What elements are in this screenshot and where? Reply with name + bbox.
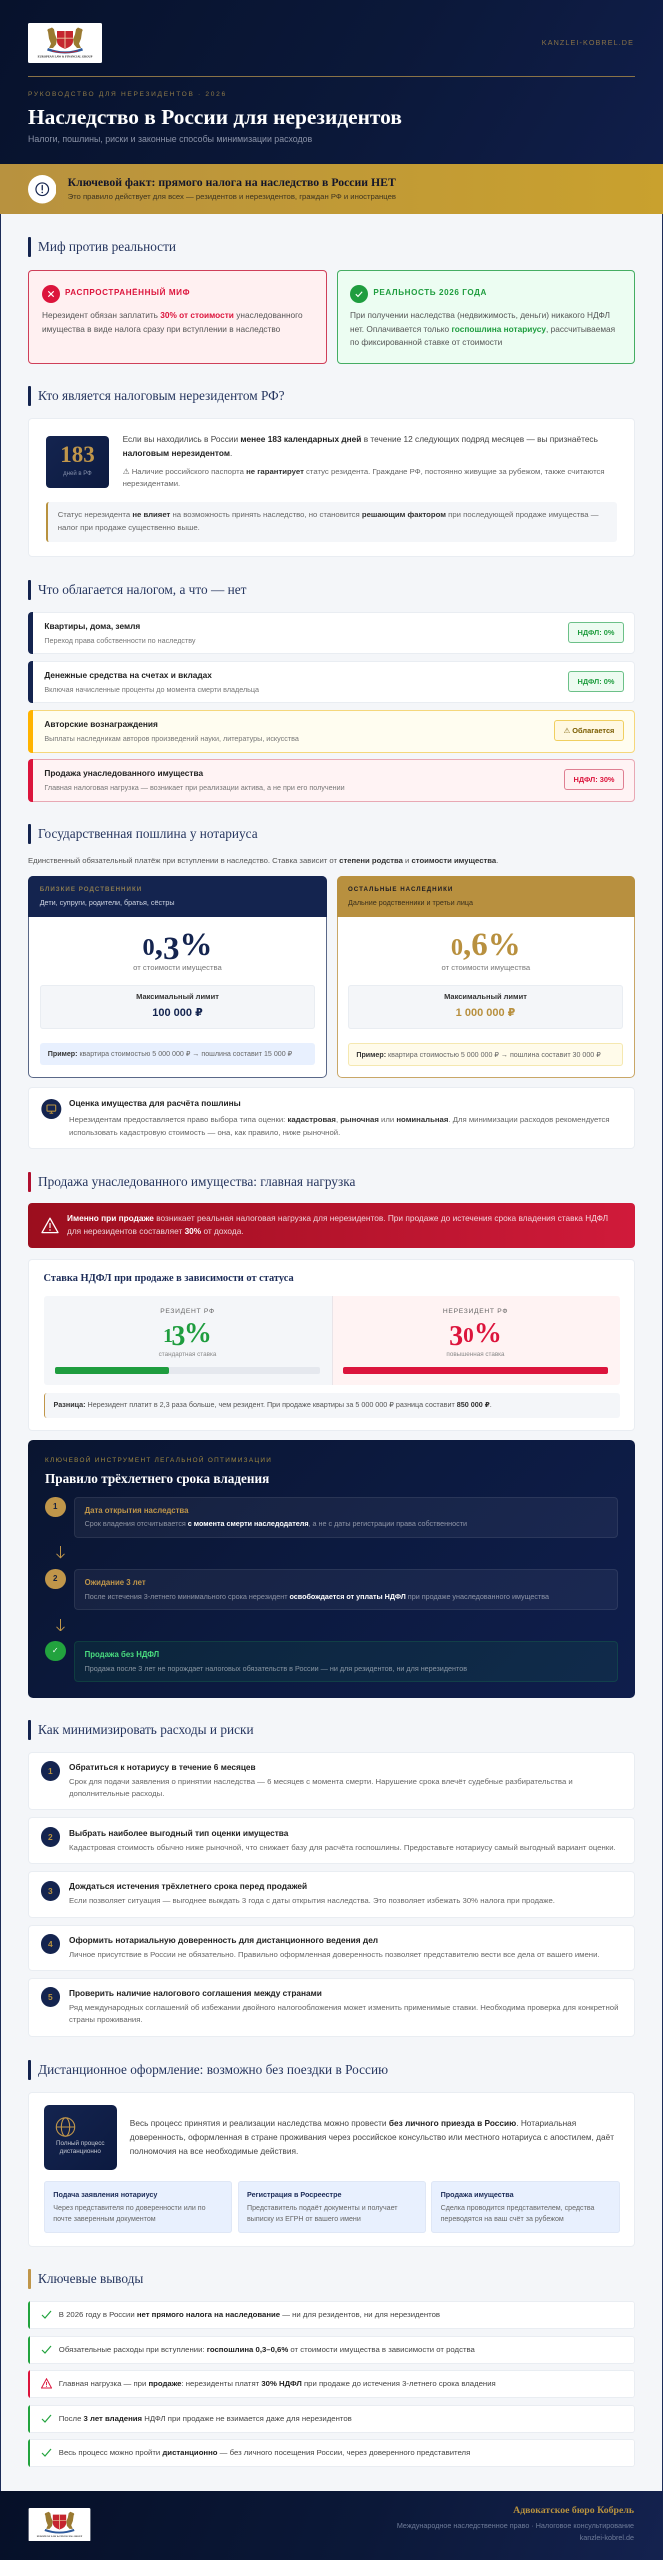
tip card 3	[28, 1871, 635, 1918]
step 2	[45, 1569, 618, 1610]
tip card 2	[28, 1817, 635, 1864]
row: sale of inherited property	[28, 759, 635, 802]
tip card 3: Если позволяет ситуация — выгоднее выждать 3 года с даты открытия наследства. Это позволяет избежать 30% налога при продаже.	[69, 1896, 555, 1905]
row: real estate: Квартиры, дома, земля	[44, 621, 140, 631]
step 2: После истечения 3-летнего минимального срока нерезидент освобождается от уплаты НДФЛ при продаже унаследованного имущества	[85, 1592, 549, 1601]
resident column: 13%	[163, 1318, 212, 1352]
myth text: имущества в виде налога сразу при вступлении в наследство	[42, 324, 280, 334]
header band: БЛИЗКИЕ РОДСТВЕННИКИ	[40, 886, 142, 893]
step 1	[45, 1497, 618, 1538]
non-resident column: повышенная ставка	[446, 1351, 505, 1358]
tip card 3: 3	[48, 1886, 53, 1896]
difference note	[44, 1393, 620, 1418]
logo: EUROPEAN LAW & FINANCIAL GROUP	[37, 55, 92, 59]
heading: myth vs reality: Миф против реальности	[38, 239, 176, 254]
callout: налог при продаже существенно выше.	[58, 523, 200, 532]
valuation text	[69, 1115, 610, 1137]
reality text: При получении наследства (недвижимость, деньги) никакого НДФЛ	[350, 310, 610, 320]
row: sale of inherited property: Продажа унаследованного имущества	[44, 768, 203, 778]
tip card 4	[28, 1925, 635, 1971]
rule title: Правило трёхлетнего срока владения	[45, 1471, 269, 1486]
title: Наследство в России для нерезидентов	[28, 105, 402, 129]
arrow	[56, 1546, 65, 1558]
panel: other heirs: от стоимости имущества	[441, 963, 530, 972]
globe badge	[44, 2105, 117, 2170]
valuation title: Оценка имущества для расчёта пошлины	[69, 1098, 241, 1108]
state fee intro: Единственный обязательный платёж при вступлении в наследство. Ставка зависит от степени родства и стоимости имущества.	[28, 856, 498, 865]
heading: state fee: Государственная пошлина у нотариуса	[38, 826, 258, 841]
remote text: полномочия на все необходимые действия.	[130, 2146, 298, 2156]
step 1: Срок владения отсчитывается с момента смерти наследодателя, а не с даты регистрации права собственности	[85, 1519, 467, 1528]
step 1: 1	[53, 1502, 57, 1511]
step: notary: почте заверенным документом	[53, 2215, 156, 2223]
row: real estate: НДФЛ: 0%	[578, 628, 614, 637]
header	[0, 0, 663, 164]
header band: Дети, супруги, родители, братья, сёстры	[40, 898, 175, 907]
reality text: нет. Оплачивается только госпошлина нотариусу, рассчитываемая	[350, 324, 615, 334]
eyebrow: КЛЮЧЕВОЙ ИНСТРУМЕНТ ЛЕГАЛЬНОЙ ОПТИМИЗАЦИИ	[45, 1457, 272, 1464]
non-resident column: НЕРЕЗИДЕНТ РФ	[443, 1308, 508, 1315]
passport warning: ⚠ Наличие российского паспорта не гарантирует статус резидента. Граждане РФ, постоянно живущие за рубежом, также считаются	[123, 467, 605, 476]
icon: cross	[42, 285, 60, 303]
panel: property valuation	[28, 1087, 635, 1149]
myth text: Нерезидент обязан заплатить 30% от стоимости унаследованного	[42, 310, 303, 320]
heading: who is non-resident: Кто является налоговым нерезидентом РФ?	[38, 388, 285, 403]
limit box: Максимальный лимит	[136, 992, 219, 1001]
row: bank deposits	[28, 661, 635, 703]
definition text: налоговым нерезидентом.	[123, 448, 232, 458]
takeaway 4: После 3 лет владения НДФЛ при продаже не взимается даже для нерезидентов	[59, 2414, 352, 2423]
step: sale: Продажа имущества	[441, 2190, 514, 2199]
step: sale	[431, 2181, 620, 2233]
step 3: Продажа без НДФЛ	[85, 1650, 159, 1659]
footer	[0, 2491, 663, 2560]
row: royalties	[28, 710, 635, 753]
step 3: Продажа после 3 лет не порождает налоговых обязательств в России — ни для резидентов, ни для нерезидентов	[85, 1664, 467, 1673]
limit box	[40, 985, 315, 1029]
step 1: Дата открытия наследства	[85, 1506, 188, 1515]
step 3	[45, 1641, 618, 1682]
heading: what is taxed: Что облагается налогом, а что — нет	[38, 582, 246, 597]
reality text	[350, 310, 615, 347]
tip card 3: Дождаться истечения трёхлетнего срока перед продажей	[69, 1881, 307, 1891]
takeaway 5	[28, 2439, 635, 2467]
step: registry: Регистрация в Росреестре	[247, 2190, 341, 2199]
step 3: ✓	[52, 1646, 59, 1655]
globe badge: Полный процесс	[56, 2140, 105, 2147]
heading: minimise costs: Как минимизировать расходы и риски	[38, 1722, 254, 1737]
callout: Статус нерезидента не влияет на возможность принять наследство, но становится решающим фактором при последующей продаже имущества —	[58, 510, 599, 519]
step 2: Ожидание 3 лет	[85, 1578, 146, 1587]
tip card 5: 5	[48, 1992, 53, 2002]
passport warning: нерезидентами.	[123, 479, 180, 488]
takeaway 4	[28, 2405, 635, 2433]
row: real estate: Переход права собственности по наследству	[44, 636, 196, 645]
callout	[46, 502, 617, 542]
tip card 1: Срок для подачи заявления о принятии наследства — 6 месяцев с момента смерти. Нарушение срока влечёт судебные разбирательства и	[69, 1777, 573, 1786]
heading: key takeaways	[28, 2269, 143, 2289]
183 days badge: 183	[60, 442, 95, 467]
example	[40, 1043, 315, 1065]
heading: sale of inherited property: Продажа унаследованного имущества: главная нагрузка	[38, 1174, 355, 1189]
row: royalties: ⚠ Облагается	[564, 726, 614, 735]
row: royalties: Авторские вознаграждения	[44, 719, 158, 729]
tip card 5: Ряд международных соглашений об избежании двойного налогообложения может изменить применимые ставки. Необходима проверка для конкретной	[69, 2003, 618, 2012]
step: registry: Представитель подаёт документы и получает	[247, 2204, 398, 2212]
icon: check	[350, 285, 368, 303]
subtitle: Налоги, пошлины, риски и законные способы минимизации расходов	[28, 134, 312, 144]
footer logo: EUROPEAN LAW & FINANCIAL GROUP	[36, 2535, 82, 2538]
heading: remote process: Дистанционное оформление: возможно без поездки в Россию	[38, 2062, 388, 2077]
reality label: РЕАЛЬНОСТЬ 2026 ГОДА	[373, 288, 487, 297]
example	[348, 1043, 623, 1066]
step 2: 2	[53, 1574, 57, 1583]
panel: close relatives: от стоимости имущества	[133, 963, 222, 972]
rate 0.6%: 0,6%	[451, 927, 521, 963]
icon: globe	[56, 2117, 76, 2137]
panel: myth	[28, 270, 327, 364]
example: Пример: квартира стоимостью 5 000 000 ₽ → пошлина составит 30 000 ₽	[356, 1051, 601, 1059]
header band: ОСТАЛЬНЫЕ НАСЛЕДНИКИ	[348, 886, 453, 893]
tip card 1: дополнительные расходы.	[69, 1789, 164, 1798]
non-resident column: 30%	[449, 1318, 502, 1352]
globe badge: дистанционно	[60, 2148, 101, 2155]
panel: other heirs	[337, 876, 635, 1078]
definition text	[123, 434, 598, 458]
step: notary: Подача заявления нотариусу	[53, 2190, 157, 2199]
site address: KANZLEI-KOBREL.DE	[542, 38, 634, 47]
footer logo	[28, 2508, 90, 2541]
tip card 5: Проверить наличие налогового соглашения между странами	[69, 1988, 322, 1998]
takeaway 3	[28, 2370, 635, 2398]
header band: Дальние родственники и третьи лица	[348, 898, 473, 907]
limit box: 100 000 ₽	[152, 1007, 203, 1019]
step: notary: Через представителя по доверенности или по	[53, 2204, 206, 2212]
row: bank deposits: Денежные средства на счетах и вкладах	[44, 670, 212, 680]
valuation text: Нерезидентам предоставляется право выбора типа оценки: кадастровая, рыночная или номинальная. Для минимизации расходов рекомендуется	[69, 1115, 610, 1124]
limit box: Максимальный лимит	[444, 992, 527, 1001]
definition text: Если вы находились в России менее 183 календарных дней в течение 12 следующих подряд месяцев — вы признаётесь	[123, 434, 598, 444]
tip card 2: Выбрать наиболее выгодный тип оценки имущества	[69, 1828, 288, 1838]
non-resident column	[332, 1296, 620, 1385]
tip card 4: Оформить нотариальную доверенность для дистанционного ведения дел	[69, 1935, 378, 1945]
arrow	[56, 1619, 65, 1631]
row: bank deposits: Включая начисленные проценты до момента смерти владельца	[44, 685, 259, 694]
key fact text: Это правило действует для всех — резидентов и нерезидентов, граждан РФ и иностранцев	[68, 192, 396, 201]
step: registry	[238, 2181, 426, 2233]
tip card 1: 1	[48, 1766, 53, 1776]
alert text	[67, 1213, 608, 1236]
takeaway 2	[28, 2336, 635, 2364]
panel: non-resident definition	[28, 418, 635, 557]
remote text: Весь процесс принятия и реализации наследства можно провести без личного приезда в Россию. Нотариальная	[130, 2118, 576, 2128]
footer address: kanzlei-kobrel.de	[580, 2533, 634, 2542]
footer description: Международное наследственное право · Налоговое консультирование	[397, 2521, 634, 2530]
183 days badge: дней в РФ	[63, 471, 92, 477]
resident column	[44, 1296, 332, 1385]
panel: close relatives	[28, 876, 327, 1078]
183 days badge	[46, 436, 109, 488]
logo	[28, 23, 102, 63]
tip card 1: Обратиться к нотариусу в течение 6 месяцев	[69, 1762, 256, 1772]
myth label: РАСПРОСТРАНЁННЫЙ МИФ	[65, 288, 190, 297]
rate 0.3%: 0,3%	[143, 927, 212, 967]
heading: key takeaways: Ключевые выводы	[38, 2271, 143, 2286]
key fact heading: Ключевой факт: прямого налога на наследство в России НЕТ	[68, 176, 396, 189]
row: sale of inherited property: НДФЛ: 30%	[573, 775, 615, 784]
step: sale: переводятся на ваш счёт за рубежом	[441, 2215, 564, 2223]
alert text: для нерезидентов составляет 30% от дохода.	[67, 1226, 244, 1236]
takeaway 1: В 2026 году в России нет прямого налога на наследование — ни для резидентов, ни для нерезидентов	[59, 2310, 440, 2319]
step: sale: Сделка проводится представителем, средства	[441, 2204, 594, 2212]
takeaway 2: Обязательные расходы при вступлении: госпошлина 0,3–0,6% от стоимости имущества в зависимости от родства	[59, 2344, 475, 2354]
header band	[337, 876, 635, 917]
takeaway 1	[28, 2301, 635, 2329]
panel: reality	[337, 270, 635, 364]
row: real estate	[28, 612, 635, 654]
header band	[28, 876, 327, 917]
resident column: стандартная ставка	[159, 1351, 216, 1358]
remote text: доверенность, оформленная в стране проживания через российское консульство или местного нотариуса с апостилем, даёт	[130, 2132, 614, 2142]
bar: 30%	[343, 1367, 608, 1374]
tip card 4: 4	[48, 1939, 53, 1949]
step: registry: выписку из ЕГРН от вашего имени	[247, 2215, 361, 2223]
row: sale of inherited property: Главная налоговая нагрузка — возникает при реализации актива, а не при его получении	[44, 783, 345, 792]
tip card 1	[28, 1752, 635, 1810]
difference note: Разница: Нерезидент платит в 2,3 раза больше, чем резидент. При продаже квартиры за 5 000 000 ₽ разница составит 850 000 ₽.	[54, 1400, 492, 1409]
key fact banner	[0, 164, 663, 214]
step: notary	[44, 2181, 232, 2233]
alert text: Именно при продаже возникает реальная налоговая нагрузка для нерезидентов. При продаже до истечения срока владения ставка НДФЛ	[67, 1213, 608, 1223]
alert banner	[28, 1203, 635, 1248]
valuation text: использовать кадастровую стоимость — она, как правило, ниже рыночной.	[69, 1128, 340, 1137]
reality text: по фиксированной ставке от стоимости	[350, 337, 502, 347]
example: Пример: квартира стоимостью 5 000 000 ₽ → пошлина составит 15 000 ₽	[48, 1050, 292, 1058]
tip card 5	[28, 1978, 635, 2037]
icon: monitor	[41, 1099, 62, 1119]
remote text	[130, 2118, 614, 2156]
limit box: 1 000 000 ₽	[456, 1007, 515, 1019]
comparison title: Ставка НДФЛ при продаже в зависимости от статуса	[44, 1273, 294, 1284]
icon: exclamation	[28, 175, 56, 204]
panel: remote process	[28, 2092, 635, 2247]
panel: tax comparison	[28, 1259, 635, 1431]
icon: warning	[41, 1218, 59, 1234]
heading: myth vs reality	[28, 237, 176, 257]
eyebrow: РУКОВОДСТВО ДЛЯ НЕРЕЗИДЕНТОВ · 2026	[28, 91, 227, 98]
passport warning	[123, 467, 605, 488]
tip card 2: 2	[48, 1832, 53, 1842]
tip card 2: Кадастровая стоимость обычно ниже рыночной, что снижает базу для расчёта госпошлины. Предоставьте нотариусу самый выгодный вариант оценки.	[69, 1843, 616, 1852]
footer firm name: Адвокатское бюро Кобрель	[513, 2505, 634, 2516]
resident column: РЕЗИДЕНТ РФ	[160, 1308, 215, 1315]
tip card 5: страны проживания.	[69, 2015, 143, 2024]
limit box	[348, 985, 623, 1029]
myth text	[42, 310, 303, 334]
row: royalties: Выплаты наследникам авторов произведений науки, литературы, искусства	[44, 734, 299, 743]
panel: three-year rule	[28, 1440, 635, 1698]
takeaway 3: Главная нагрузка — при продаже: нерезиденты платят 30% НДФЛ при продаже до истечения 3-летнего срока владения	[59, 2379, 496, 2388]
takeaway 5: Весь процесс можно пройти дистанционно — без личного посещения России, через доверенного представителя	[59, 2448, 470, 2457]
bar: 13%	[55, 1367, 320, 1374]
row: bank deposits: НДФЛ: 0%	[578, 677, 614, 686]
tip card 4: Личное присутствие в России не обязательно. Правильно оформленная доверенность позволяет представителю вести все дела от вашего имени.	[69, 1950, 600, 1959]
